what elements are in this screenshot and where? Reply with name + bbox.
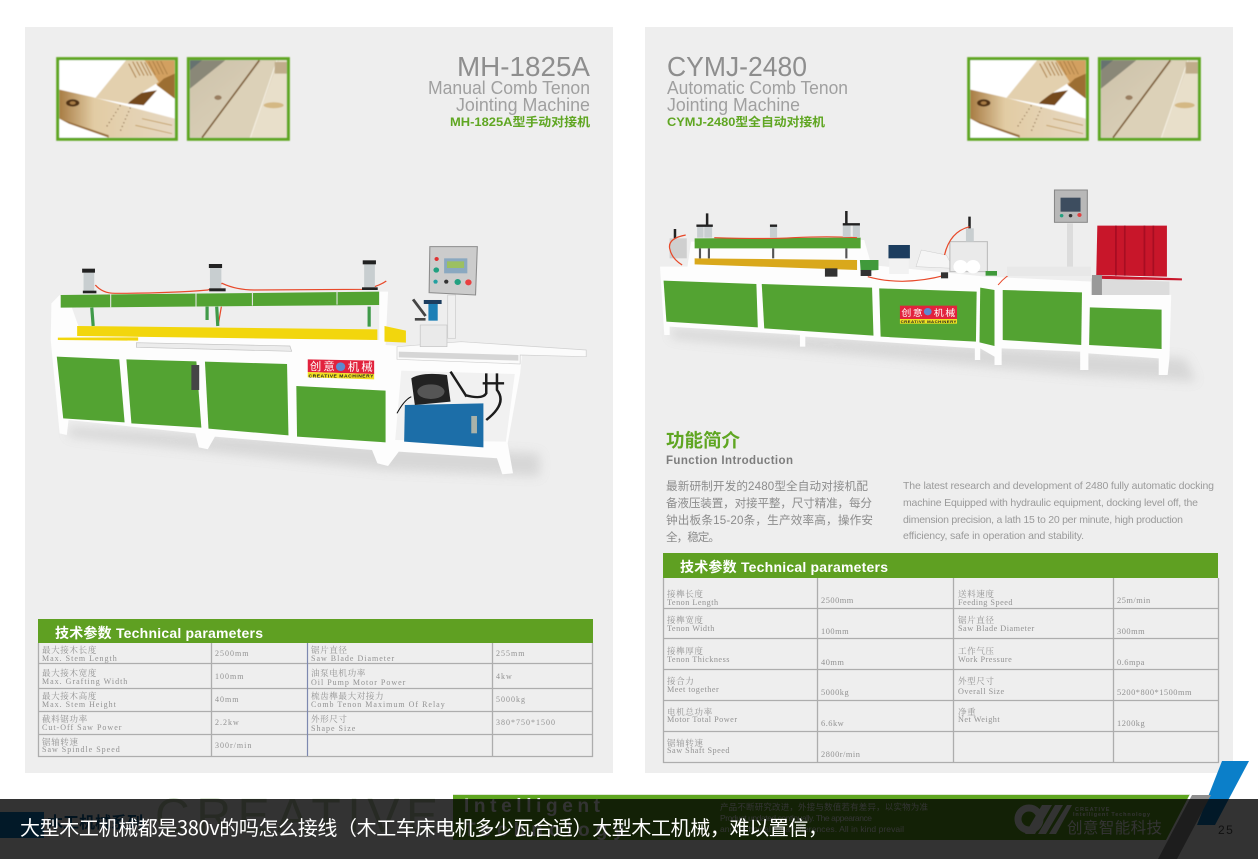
- heading: CYMJ-2480 model title: [667, 51, 848, 129]
- text block: English introduction: dimension precision, a lath 15 to 20 per minute, high production: [903, 514, 1183, 526]
- heading: MH-1825A model title: Jointing Machine: [456, 95, 590, 115]
- heading: function introduction: [666, 430, 793, 467]
- table: CYMJ-2480 technical parameters: Tenon Width: [667, 624, 715, 633]
- heading: CYMJ-2480 model title: CYMJ-2480型全自动对接机: [667, 114, 825, 129]
- illustration: CYMJ-2480 automatic comb tenon machine: CREATIVE MACHINERY: [901, 319, 957, 324]
- table: CYMJ-2480 technical parameters: 25m/min: [1117, 596, 1151, 605]
- table: MH-1825A technical parameters: 梳齿榫最大对接力: [311, 690, 384, 701]
- text block: English introduction: The latest research and development of 2480 fully automatic docking: [903, 480, 1214, 492]
- table: CYMJ-2480 technical parameters: 锯片直径: [958, 614, 995, 625]
- table: MH-1825A technical parameters: Max. Stem Length: [42, 654, 118, 663]
- table: CYMJ-2480 technical parameters: Feeding Speed: [958, 598, 1013, 607]
- footer: green banner: 产品不断研究改进，外接与数值若有差异，以实物为准: [720, 802, 928, 812]
- table: CYMJ-2480 technical parameters: 净重: [958, 706, 976, 717]
- text block: Chinese introduction: 备液压装置，对接平整，尺寸精准，每分: [666, 496, 872, 510]
- table: MH-1825A technical parameters: 油泵电机功率: [311, 667, 366, 678]
- decorative slash: gray stripe: [1158, 795, 1211, 859]
- table: CYMJ-2480 technical parameters: 接榫长度: [667, 588, 704, 599]
- illustration: CYMJ-2480 automatic comb tenon machine: 创意: [901, 307, 923, 319]
- table: CYMJ-2480 technical parameters: Tenon Thickness: [667, 655, 730, 664]
- heading: CYMJ-2480 model title: CYMJ-2480: [667, 51, 807, 82]
- table: MH-1825A technical parameters: 外形尺寸: [311, 713, 348, 724]
- page number: 25: [1218, 823, 1234, 837]
- table: CYMJ-2480 technical parameters: 2800r/min: [821, 750, 861, 759]
- logo: Creative Intelligent Technology: [1018, 805, 1162, 837]
- table: MH-1825A technical parameters: 5000kg: [496, 695, 526, 704]
- heading: MH-1825A model title: Manual Comb Tenon: [428, 78, 590, 98]
- heading: MH-1825A model title: [428, 51, 590, 129]
- text block: English introduction: machine Equipped with hydraulic equipment, docking level off, the: [903, 497, 1198, 509]
- table: MH-1825A technical parameters: 最大接木宽度: [42, 667, 97, 678]
- table: MH-1825A technical parameters: 锯轴转速: [42, 736, 79, 747]
- table: CYMJ-2480 technical parameters: 2500mm: [821, 596, 854, 605]
- table: MH-1825A technical parameters: Saw Blade Diameter: [311, 654, 395, 663]
- footer: CREATIVE wordmark: CREATIVE: [155, 790, 438, 843]
- table: CYMJ-2480 technical parameters: 接榫厚度: [667, 645, 704, 656]
- table: CYMJ-2480 technical parameters: 锯轴转速: [667, 737, 704, 748]
- table: MH-1825A technical parameters: Comb Tenon Maximum Of Relay: [311, 700, 446, 709]
- heading: function introduction: Function Introduction: [666, 455, 793, 467]
- table: MH-1825A technical parameters: 锯片直径: [311, 644, 348, 655]
- table: MH-1825A technical parameters: 技术参数 Technical parameters: [55, 625, 263, 641]
- table: MH-1825A technical parameters: 2500mm: [215, 649, 249, 658]
- table: MH-1825A technical parameters: 100mm: [215, 672, 244, 681]
- footer: green banner: Product updated continually. The appearance: [720, 813, 872, 823]
- table: MH-1825A technical parameters: 截料锯功率: [42, 713, 88, 724]
- table: MH-1825A technical parameters: Max. Stem Height: [42, 700, 117, 709]
- table: CYMJ-2480 technical parameters: Meet together: [667, 685, 719, 694]
- heading: MH-1825A model title: MH-1825A型手动对接机: [450, 114, 590, 129]
- table: CYMJ-2480 technical parameters: [663, 553, 1219, 762]
- table: CYMJ-2480 technical parameters: Saw Shaft Speed: [667, 746, 730, 755]
- table: CYMJ-2480 technical parameters: 技术参数 Technical parameters: [680, 559, 888, 575]
- footer: series label: 木工机械系列: [47, 813, 143, 832]
- table: CYMJ-2480 technical parameters: 1200kg: [1117, 719, 1145, 728]
- illustration: MH-1825A manual comb tenon machine: [51, 247, 586, 477]
- table: MH-1825A technical parameters: 2.2kw: [215, 718, 240, 727]
- logo: Creative Intelligent Technology: 创意智能科技: [1067, 818, 1162, 837]
- image: finger joint wood sample: [969, 59, 1087, 139]
- logo: Creative Intelligent Technology: CREATIVE: [1075, 807, 1110, 813]
- image: finger joint wood sample: [58, 59, 176, 139]
- text block: Chinese introduction: 最新研制开发的2480型全自动对接机配: [666, 479, 868, 493]
- table: MH-1825A technical parameters: 4kw: [496, 672, 513, 681]
- image: wood boards sample: [1099, 59, 1199, 139]
- table: CYMJ-2480 technical parameters: 40mm: [821, 658, 844, 667]
- table: MH-1825A technical parameters: 40mm: [215, 695, 239, 704]
- table: CYMJ-2480 technical parameters: 外型尺寸: [958, 675, 995, 686]
- table: MH-1825A technical parameters: Cut-Off Saw Power: [42, 723, 122, 732]
- table: MH-1825A technical parameters: Shape Size: [311, 724, 356, 733]
- table: CYMJ-2480 technical parameters: 送料速度: [958, 588, 995, 599]
- table: CYMJ-2480 technical parameters: 5000kg: [821, 688, 849, 697]
- illustration: MH-1825A manual comb tenon machine: 创意: [310, 359, 335, 373]
- text block: English introduction: [903, 480, 1214, 542]
- table: CYMJ-2480 technical parameters: 0.6mpa: [1117, 658, 1145, 667]
- text block: English introduction: efficiency, safe in operation and stability.: [903, 530, 1084, 542]
- table: CYMJ-2480 technical parameters: 100mm: [821, 627, 849, 636]
- heading: CYMJ-2480 model title: Jointing Machine: [667, 95, 800, 115]
- table: CYMJ-2480 technical parameters: 接榫宽度: [667, 614, 704, 625]
- table: CYMJ-2480 technical parameters: 电机总功率: [667, 706, 713, 717]
- decorative slash: blue stripe: [1197, 761, 1249, 825]
- table: CYMJ-2480 technical parameters: Tenon Length: [667, 598, 719, 607]
- table: MH-1825A technical parameters: 300r/min: [215, 741, 252, 750]
- table: MH-1825A technical parameters: Saw Spindle Speed: [42, 745, 121, 754]
- footer: green banner: [453, 794, 1190, 841]
- heading: CYMJ-2480 model title: Automatic Comb Tenon: [667, 78, 848, 98]
- heading: function introduction: 功能简介: [666, 430, 741, 451]
- footer: green banner: Technology: [464, 820, 624, 841]
- illustration: MH-1825A manual comb tenon machine: 机械: [348, 360, 373, 374]
- caption bar: [0, 799, 1258, 859]
- table: CYMJ-2480 technical parameters: Overall Size: [958, 687, 1005, 696]
- table: CYMJ-2480 technical parameters: Saw Blade Diameter: [958, 624, 1035, 633]
- text block: Chinese introduction: 钟出板条15-20条，生产效率高，操作安: [666, 513, 873, 527]
- panel: CYMJ-2480 right page: [645, 27, 1233, 773]
- table: CYMJ-2480 technical parameters: 6.6kw: [821, 719, 845, 728]
- footer: green banner: and technical data differences. All in kind prevail: [720, 824, 904, 834]
- table: MH-1825A technical parameters: 最大接木高度: [42, 690, 97, 701]
- table: MH-1825A technical parameters: Max. Grafting Width: [42, 677, 128, 686]
- image: wood boards sample: [188, 59, 288, 139]
- table: CYMJ-2480 technical parameters: Motor Total Power: [667, 715, 738, 724]
- table: MH-1825A technical parameters: 最大接木长度: [42, 644, 97, 655]
- heading: MH-1825A model title: MH-1825A: [457, 51, 590, 82]
- table: CYMJ-2480 technical parameters: 5200*800*1500mm: [1117, 688, 1192, 697]
- table: MH-1825A technical parameters: Oil Pump Motor Power: [311, 678, 406, 687]
- illustration: MH-1825A manual comb tenon machine: CREATIVE MACHINERY: [308, 373, 374, 379]
- table: CYMJ-2480 technical parameters: 工作气压: [958, 645, 995, 656]
- illustration: CYMJ-2480 automatic comb tenon machine: 机械: [934, 307, 956, 319]
- table: CYMJ-2480 technical parameters: 接合力: [667, 675, 694, 686]
- footer: series label: [0, 812, 143, 838]
- table: MH-1825A technical parameters: [38, 619, 593, 756]
- illustration: CYMJ-2480 automatic comb tenon machine: [660, 190, 1196, 382]
- logo: Creative Intelligent Technology: Intelligent Technology: [1073, 812, 1151, 818]
- table: CYMJ-2480 technical parameters: 300mm: [1117, 627, 1145, 636]
- text block: Chinese introduction: [666, 479, 873, 544]
- table: CYMJ-2480 technical parameters: Work Pressure: [958, 655, 1012, 664]
- table: MH-1825A technical parameters: 255mm: [496, 649, 525, 658]
- table: CYMJ-2480 technical parameters: Net Weight: [958, 715, 1000, 724]
- caption bar: 大型木工机械都是380v的吗怎么接线（木工车床电机多少瓦合适）大型木工机械，难以置信，: [20, 812, 828, 841]
- panel: MH-1825A left page: [25, 27, 613, 773]
- table: MH-1825A technical parameters: 380*750*1500: [496, 718, 556, 727]
- text block: Chinese introduction: 全，稳定。: [666, 530, 720, 544]
- footer: green banner: Intelligent: [464, 796, 601, 817]
